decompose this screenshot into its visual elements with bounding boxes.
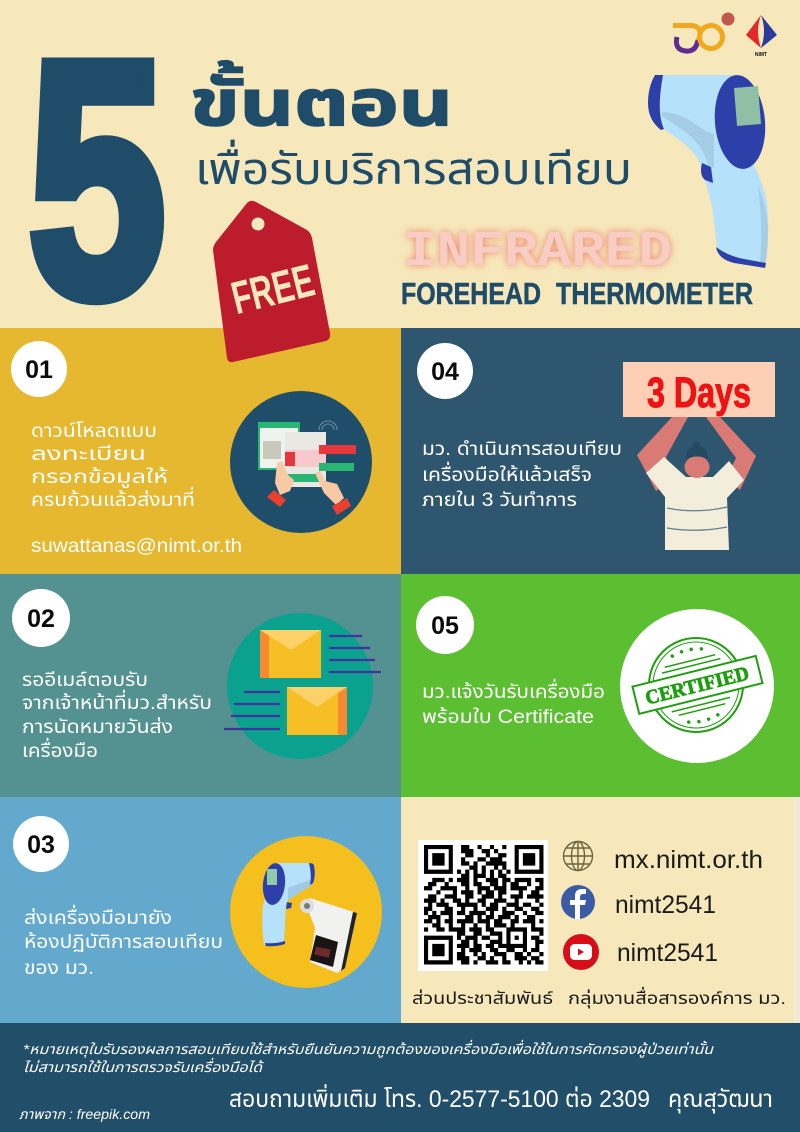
step 04 text: ภายใน 3 วันทำการ xyxy=(422,490,577,511)
step number 01 xyxy=(11,341,67,397)
step number 05: 05 xyxy=(431,612,459,640)
step 03 text: ส่งเครื่องมือมายัง xyxy=(24,904,172,929)
step 02 text xyxy=(22,670,212,762)
step 03 text: ของ มว. xyxy=(24,958,94,979)
contact phone line: คุณสุวัฒนา xyxy=(668,1086,773,1114)
icon: certified stamp xyxy=(620,609,774,763)
public relations credit: กลุ่มงานสื่อสารองค์การ มว. xyxy=(568,986,786,1009)
sign: 3 Days: 3 Days xyxy=(647,369,751,417)
title: ขั้นตอน: ขั้นตอน xyxy=(190,60,453,139)
step 05 text xyxy=(422,678,605,728)
disclaimer note: *หมายเหตุใบรับรองผลการสอบเทียบใช้สำหรับยืนยันความถูกต้องของเครื่องมือเพื่อใช้ในการคัดกรองผู้ป่วยเท่านั้น xyxy=(23,1039,715,1058)
heading: FOREHEAD THERMOMETER xyxy=(401,276,753,311)
public relations credit xyxy=(412,986,786,1009)
heading: INFRARED: INFRARED xyxy=(403,224,672,281)
step number 02: 02 xyxy=(27,605,55,633)
step 03 text xyxy=(24,904,223,979)
step number 05 xyxy=(416,596,474,654)
step 05 text: มว.แจ้งวันรับเครื่องมือ xyxy=(422,678,605,703)
panel: step 03 xyxy=(0,797,401,1023)
panel: step 04 xyxy=(401,328,800,574)
step 01 text xyxy=(31,421,242,557)
gun thermometer xyxy=(261,862,315,946)
step 04 text: มว. ดำเนินการสอบเทียบ xyxy=(422,439,622,460)
step 02 text: เครื่องมือ xyxy=(22,737,98,762)
icon: online form on tablet xyxy=(230,391,372,533)
disclaimer note: ไม่สามารถใช้ในการตรวจรับเครื่องมือได้ xyxy=(23,1057,264,1075)
panel: footer xyxy=(0,1023,800,1132)
panel: step 05 xyxy=(401,574,800,797)
facebook link: nimt2541 xyxy=(615,891,716,919)
illustration: person holding 3 Days sign xyxy=(623,362,775,550)
sign: 3 Days xyxy=(623,362,775,417)
step 01 text: ครบถ้วนแล้วส่งมาที่ xyxy=(31,486,195,511)
heading: FOREHEAD THERMOMETER: THERMOMETER xyxy=(556,276,753,311)
subtitle: เพื่อรับบริการสอบเทียบ xyxy=(195,139,632,194)
icon: two thermometers xyxy=(230,836,382,988)
logo: NIMT xyxy=(746,15,777,58)
step 03 text: ห้องปฏิบัติการสอบเทียบ xyxy=(24,930,223,953)
step number 04: 04 xyxy=(431,358,459,386)
website link xyxy=(564,842,763,874)
QR code xyxy=(418,840,548,971)
step 01 text: ดาวน์โหลดแบบ xyxy=(31,421,157,442)
step 01 text: suwattanas@nimt.or.th xyxy=(31,536,242,557)
disclaimer note xyxy=(23,1039,715,1075)
panel: step 01 xyxy=(0,328,401,574)
facebook link xyxy=(561,885,716,919)
heading: INFRARED: INFRARED xyxy=(403,224,672,281)
panel: contact xyxy=(401,797,800,1023)
image credit: ภาพจาก : freepik.com xyxy=(19,1106,150,1122)
icon: red FREE price tag xyxy=(213,201,330,362)
youtube link xyxy=(563,934,718,970)
step number 01: 01 xyxy=(25,356,53,384)
logo: NIMT: NIMT xyxy=(755,52,767,58)
wall-mounted thermometer xyxy=(300,898,357,973)
icon: certified stamp: CERTIFIED xyxy=(643,662,751,709)
icon: flying envelopes xyxy=(224,613,381,759)
icon: red FREE price tag: FREE xyxy=(226,254,319,324)
heading: FOREHEAD THERMOMETER: FOREHEAD xyxy=(401,276,541,311)
step 02 text: จากเจ้าหน้าที่มว.สำหรับ xyxy=(22,689,212,714)
logo: 60 years xyxy=(673,12,734,51)
public relations credit: ส่วนประชาสัมพันธ์ xyxy=(412,989,553,1008)
step 04 text xyxy=(422,439,622,511)
step number 02 xyxy=(12,589,70,647)
step 04 text: เครื่องมือให้แล้วเสร็จ xyxy=(422,461,592,486)
step number 04 xyxy=(417,343,473,399)
step 02 text: รออีเมล์ตอบรับ xyxy=(22,670,148,691)
contact phone line: สอบถามเพิ่มเติม โทร. 0-2577-5100 ต่อ 2309 xyxy=(229,1083,650,1113)
big number 5: 5 xyxy=(28,0,166,367)
step 05 text: พร้อมใบ Certificate xyxy=(422,705,594,728)
panel: step 02 xyxy=(0,574,401,797)
youtube link: nimt2541 xyxy=(617,939,718,967)
step number 03: 03 xyxy=(27,831,55,859)
step 02 text: การนัดหมายวันส่ง xyxy=(22,715,173,738)
step 01 text: ลงทะเบียน xyxy=(31,444,146,465)
website link: mx.nimt.or.th xyxy=(614,846,763,874)
illustration: infrared thermometer xyxy=(648,73,769,268)
step number 03 xyxy=(13,816,69,872)
step 01 text: กรอกข้อมูลให้ xyxy=(31,465,168,489)
